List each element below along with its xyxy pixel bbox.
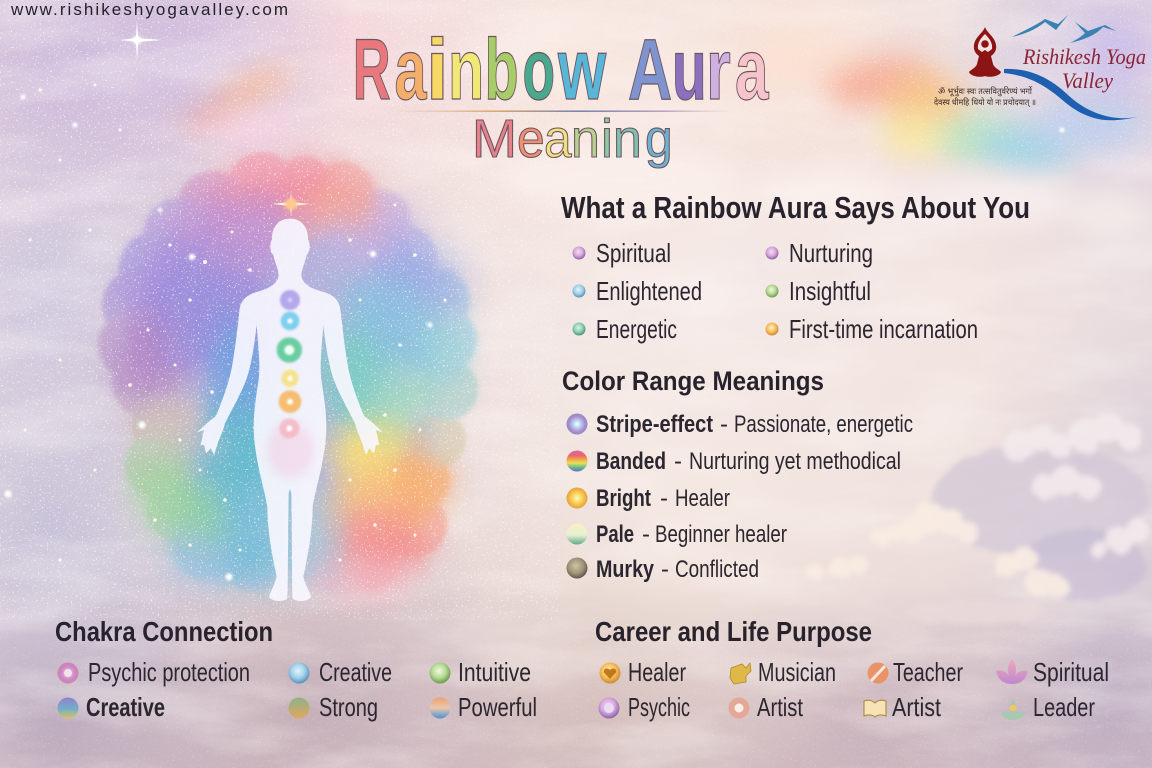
heading: Rainbow Aura: a (394, 21, 428, 118)
row: Stripe-effect: - (720, 411, 728, 438)
item: Musician: Musician (758, 657, 836, 687)
row: Murky (566, 556, 759, 583)
chakra: root (279, 418, 299, 438)
heading: Meaning: g (645, 108, 673, 168)
icon: blue river swoosh (1004, 69, 1137, 120)
row: Banded: - (674, 448, 682, 475)
cumulus clouds bottom right (806, 412, 1150, 624)
heading: Meaning: a (544, 108, 572, 168)
item: Nurturing (766, 238, 873, 268)
item: Psychic protection (58, 657, 250, 687)
heading: What a Rainbow Aura Says About You (561, 190, 1030, 225)
item: Artist (728, 692, 804, 722)
item: Artist: Artist (757, 692, 804, 722)
icon: blue mountains (1012, 15, 1116, 43)
row: Banded: Banded (596, 448, 666, 475)
heading: Rainbow Aura: i (426, 21, 449, 117)
row: Pale: Pale (596, 521, 634, 548)
item: Artist book: Artist (892, 692, 942, 722)
panel: Color Range Meanings (562, 366, 913, 583)
chakra: throat (281, 312, 299, 330)
item: Spiritual lotus: Spiritual (1033, 657, 1109, 687)
item: Creative bold: Creative (86, 692, 165, 722)
chakra: solar plexus (281, 370, 299, 387)
sparkle dots (23, 84, 447, 562)
row: Murky: - (661, 556, 669, 583)
item: Psychic (598, 692, 690, 722)
logo name: Valley (1062, 68, 1113, 93)
body (197, 219, 383, 601)
row: Pale (566, 521, 787, 548)
aura scalloped edge (98, 152, 478, 591)
item: Intuitive: Intuitive (458, 657, 531, 687)
row: Stripe-effect (566, 411, 913, 438)
item: Artist book (864, 692, 942, 722)
item: Strong (288, 692, 378, 722)
row: Pale: - (642, 521, 650, 548)
item: Energetic: Energetic (596, 314, 677, 344)
aura cloud (117, 166, 463, 598)
heading: Rainbow Aura: A (628, 21, 672, 117)
heading: Chakra Connection (55, 616, 273, 647)
item: Strong: Strong (319, 692, 378, 722)
human silhouette with chakras (197, 219, 383, 601)
item: Teacher (868, 657, 963, 687)
icon: meditating figure (969, 27, 1001, 77)
website url: www.rishikeshyogavalley.com (10, 0, 288, 19)
row: Banded (566, 448, 901, 475)
item: Insightful: Insightful (789, 276, 871, 306)
row: Murky: Murky (596, 556, 655, 583)
logo: Rishikesh Yoga Valley (934, 15, 1146, 120)
item: Psychic protection: Psychic protection (88, 657, 250, 687)
title: Rainbow Aura Meaning (353, 21, 769, 169)
heading: Rainbow Aura: r (706, 23, 731, 118)
heading: Meaning: n (613, 109, 642, 169)
row: Pale: Beginner healer (655, 521, 787, 548)
item: Powerful: Powerful (458, 692, 537, 722)
item: Psychic: Psychic (628, 692, 690, 722)
pelvis glow (267, 422, 313, 478)
heading: Rainbow Aura: n (448, 21, 484, 118)
heading: Career and Life Purpose (595, 616, 872, 647)
row: Murky: Conflicted (675, 556, 759, 583)
item: Leader lotus (1001, 692, 1095, 722)
logo name (1022, 44, 1146, 93)
heading: Rainbow Aura: u (672, 22, 707, 118)
mantra text: ॐ भूर्भुवः स्वः तत्सवितुर्वरेण्यं भर्गो (938, 86, 1033, 97)
heading: Meaning (472, 108, 673, 169)
heading: Rainbow Aura: b (484, 22, 519, 118)
item: Enlightened (572, 276, 702, 306)
item: First-time incarnation: First-time incarnation (789, 314, 978, 344)
panel: What a Rainbow Aura Says About You (561, 190, 1030, 344)
item: Enlightened: Enlightened (596, 276, 702, 306)
heading: Meaning: i (601, 109, 613, 169)
heading: Rainbow Aura: a (735, 21, 769, 118)
heading: Color Range Meanings (562, 366, 824, 396)
heading: Rainbow Aura (353, 21, 769, 118)
chakra: sacral (279, 390, 301, 413)
glint stars (4, 20, 1065, 581)
chakra: crown (280, 290, 300, 310)
item: Powerful (430, 692, 537, 722)
item: Healer (600, 657, 686, 687)
row: Stripe-effect: Stripe-effect (596, 411, 713, 438)
heading: Meaning: e (517, 108, 545, 168)
heading: Meaning: M (472, 109, 517, 169)
row: Bright (566, 485, 730, 512)
panel: Chakra Connection (55, 616, 537, 722)
item: Teacher: Teacher (893, 657, 963, 687)
chakra: heart (277, 337, 302, 363)
heading: Rainbow Aura: o (522, 22, 555, 118)
rainbow glow in the sky (178, 19, 1151, 172)
heading: Meaning: n (571, 109, 600, 169)
item: Creative (288, 657, 392, 687)
item: Creative bold (58, 692, 165, 722)
item: Musician (730, 657, 836, 687)
item: Spiritual (572, 238, 671, 268)
row: Bright: Healer (675, 485, 730, 512)
heading: Rainbow Aura: w (557, 21, 607, 117)
mantra text: देवस्य धीमहि धियो यो नः प्रचोदयात् ॥ (934, 97, 1036, 108)
item: Creative: Creative (319, 657, 392, 687)
item: Healer: Healer (628, 657, 686, 687)
item: Insightful (766, 276, 871, 306)
panel: Career and Life Purpose (595, 616, 1109, 722)
item: Nurturing: Nurturing (789, 238, 873, 268)
heading: Rainbow Aura: R (353, 23, 391, 118)
item: Intuitive (430, 657, 531, 687)
item: Spiritual lotus (996, 657, 1109, 687)
item: Spiritual: Spiritual (596, 238, 671, 268)
row: Bright: Bright (596, 485, 651, 512)
row: Banded: Nurturing yet methodical (689, 448, 901, 475)
row: Bright: - (660, 485, 668, 512)
pale clouds under rainbow (500, 150, 1150, 239)
item: Energetic (572, 314, 677, 344)
row: Stripe-effect: Passionate, energetic (734, 411, 913, 438)
item: Leader lotus: Leader (1033, 692, 1095, 722)
mantra text (934, 86, 1036, 108)
